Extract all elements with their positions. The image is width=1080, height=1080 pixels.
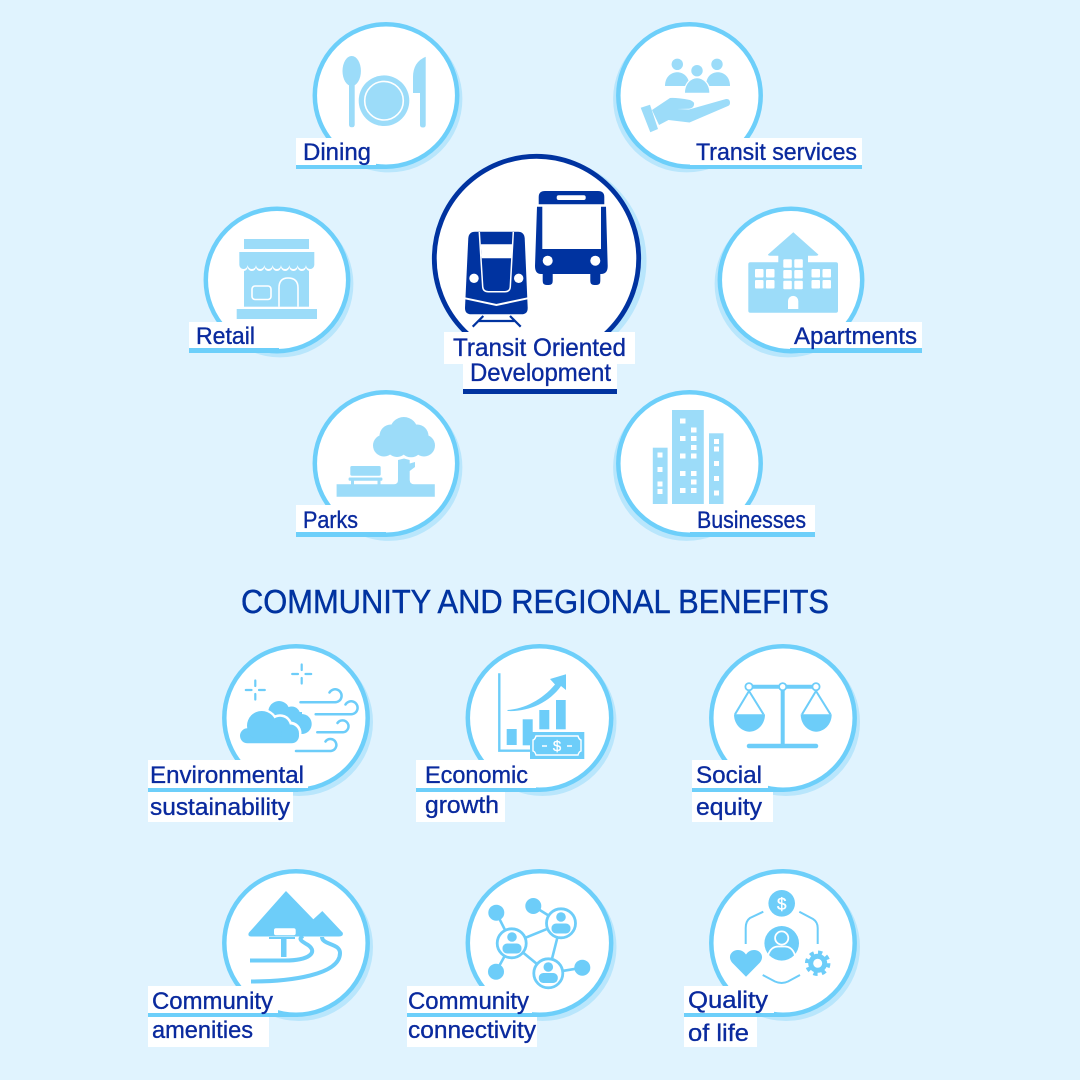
- icon: fork spoon plate knife: [342, 56, 426, 128]
- panel: social equity: [692, 646, 860, 822]
- label: Community amenities: amenities: [152, 1017, 253, 1044]
- panel: dining: [296, 24, 462, 172]
- icon: person with money, health, settings: $: [777, 894, 787, 914]
- heading: community and regional benefits: COMMUNITY AND REGIONAL BENEFITS: [241, 583, 829, 620]
- panel: economic growth: [416, 646, 616, 822]
- label: Community connectivity: [407, 986, 540, 1047]
- label: Transit Oriented Development: Transit Oriented: [453, 334, 626, 362]
- label: Community connectivity: connectivity: [408, 1017, 536, 1044]
- icon: apartment building: [748, 232, 838, 313]
- label: Transit services: Transit services: [696, 139, 857, 166]
- label: Quality of life: [684, 986, 783, 1047]
- label: Parks: Parks: [303, 507, 358, 534]
- panel: transit services: [613, 24, 862, 172]
- panel: community connectivity: [407, 871, 616, 1047]
- label: Community amenities: Community: [152, 988, 273, 1015]
- label: Quality of life: of life: [688, 1020, 749, 1047]
- icon: train: [465, 232, 528, 327]
- icon: rising chart and money: $: [553, 738, 562, 755]
- icon: office towers: [653, 410, 724, 504]
- label: Social equity: [692, 760, 783, 822]
- label: Environmental sustainability: [148, 760, 308, 822]
- label: Retail: [189, 322, 280, 353]
- label: Apartments: Apartments: [794, 323, 917, 350]
- label: Transit Oriented Development: Development: [470, 359, 611, 387]
- panel: businesses: [613, 392, 815, 541]
- panel: transit oriented development: [434, 156, 646, 394]
- label: Social equity: Social: [696, 762, 762, 789]
- panel: parks: [296, 392, 462, 541]
- label: Transit Oriented Development: [444, 332, 635, 394]
- label: Dining: [296, 138, 386, 169]
- label: Economic growth: growth: [425, 792, 499, 819]
- icon: clouds and wind: [238, 664, 358, 751]
- label: Community connectivity: Community: [408, 988, 529, 1015]
- panel: quality of life: [684, 871, 860, 1047]
- label: Economic growth: Economic: [425, 762, 528, 789]
- panel: apartments: [715, 209, 922, 357]
- label: Dining: Dining: [303, 139, 371, 166]
- panel: environmental sustainability: [148, 646, 373, 822]
- panel: retail: [189, 209, 353, 357]
- label: Environmental sustainability: sustainability: [150, 794, 290, 821]
- label: Environmental sustainability: Environmental: [150, 762, 304, 789]
- icon: hand holding people: [641, 59, 730, 132]
- icon: bus: [535, 191, 608, 285]
- icon: storefront: [237, 239, 317, 319]
- label: Quality of life: Quality: [688, 987, 768, 1014]
- label: Community amenities: [148, 986, 298, 1047]
- label: Economic growth: [416, 760, 540, 822]
- icon: connected people network: [488, 898, 590, 988]
- panel: community amenities: [148, 871, 373, 1047]
- label: Social equity: equity: [696, 794, 762, 821]
- icon: balance scale: [734, 683, 832, 746]
- label: Parks: [296, 505, 386, 537]
- icon: person with money, health, settings: [730, 890, 828, 983]
- icon: tree and bench: [337, 417, 435, 497]
- icon: mountains and path: [249, 892, 342, 982]
- label: Businesses: Businesses: [697, 507, 806, 534]
- icon: rising chart and money: [499, 673, 584, 759]
- label: Retail: Retail: [196, 323, 255, 350]
